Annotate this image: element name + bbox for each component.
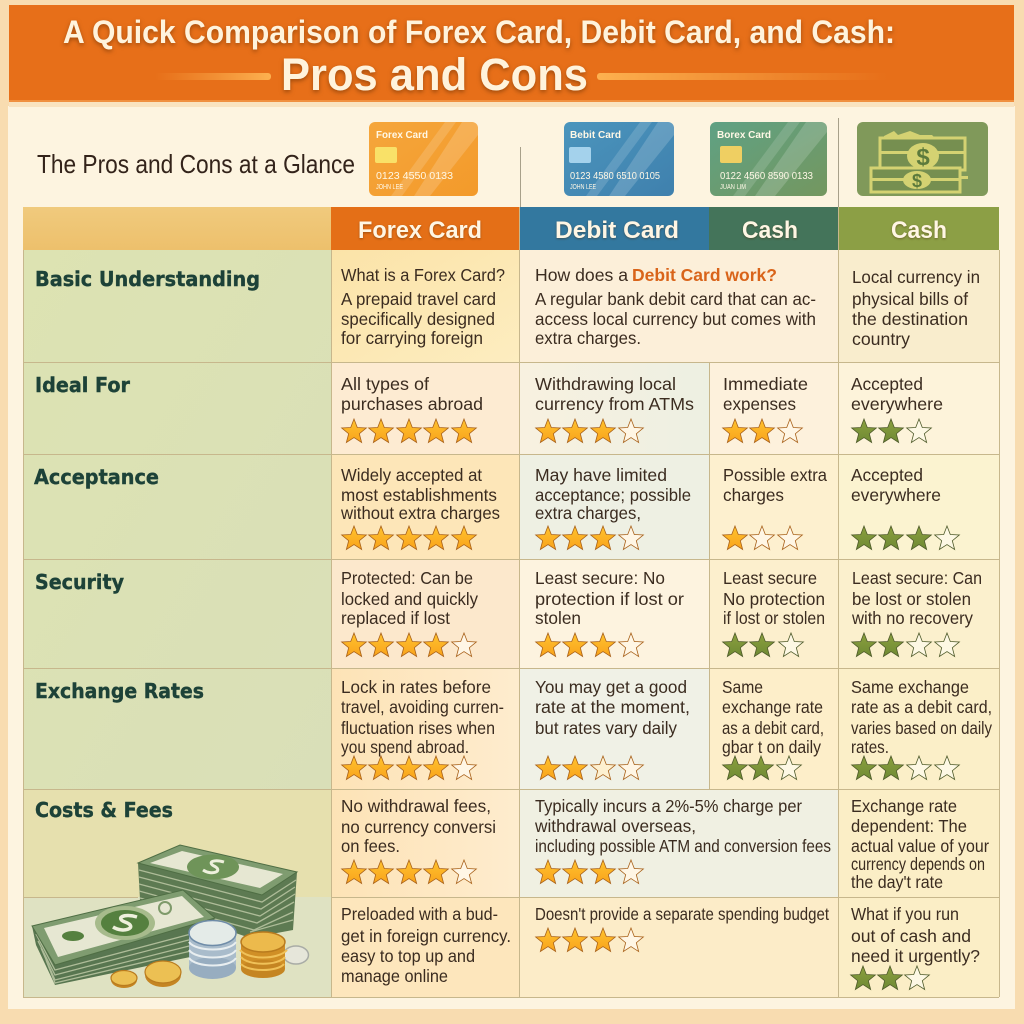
row: exchange rates, forex xyxy=(341,677,504,757)
icon: green card: JUAN LIM xyxy=(720,184,746,191)
header: forex card: Forex Card xyxy=(358,217,482,244)
row: basic understanding, cash xyxy=(852,267,980,349)
row: basic understanding, forex: What is a Forex Card? xyxy=(341,265,505,285)
row: ideal for, debit xyxy=(535,374,694,414)
row: exchange rates, cash olive: rate as a debit card, xyxy=(851,697,992,717)
row: ideal for, cash olive xyxy=(851,374,943,414)
row: budget, cash: need it urgently? xyxy=(851,946,980,966)
title line one: A Quick Comparison of Forex Card, Debit Card, and Cash: xyxy=(63,14,895,50)
stars: ideal for, debit 3 of 4 xyxy=(536,419,643,443)
row: security, forex: Protected: Can be xyxy=(341,568,473,588)
row: exchange rates, forex: fluctuation rises when xyxy=(341,718,495,738)
row: acceptance, cash green: charges xyxy=(723,485,784,505)
icon: cash: $ xyxy=(916,144,930,171)
row: security, debit: stolen xyxy=(535,608,581,628)
stars: ideal for, forex 5 of 5 xyxy=(342,419,476,443)
stars: acceptance, cash olive 3 of 4 xyxy=(852,526,959,550)
row: acceptance, cash green: Possible extra xyxy=(723,465,827,485)
row: acceptance, debit xyxy=(535,465,691,523)
row: basic understanding, debit xyxy=(535,265,816,348)
stars: security, cash olive 2 of 4 xyxy=(852,633,959,657)
row: budget, cash xyxy=(851,904,980,966)
row: exchange rates, cash green: as a debit card, xyxy=(722,718,824,738)
header: forex card xyxy=(331,207,519,250)
title banner xyxy=(9,5,1014,107)
row: basic understanding, cash: physical bills of xyxy=(852,289,968,309)
row: ideal for, cash green: expenses xyxy=(723,394,796,414)
row: ideal for, debit: Withdrawing local xyxy=(535,374,676,394)
row: exchange rates, forex: you spend abroad. xyxy=(341,737,469,757)
row: security, forex: replaced if lost xyxy=(341,608,450,628)
stars: ideal for, cash olive 2 of 3 xyxy=(852,419,931,443)
row: basic understanding, debit: A regular bank debit card that can ac- xyxy=(535,289,816,309)
row: security, cash olive: Least secure: Can xyxy=(852,568,982,588)
row: budget, forex: manage online xyxy=(341,966,448,986)
row: ideal for, forex: purchases abroad xyxy=(341,394,483,414)
icon: green card: 0122 4560 8590 0133 xyxy=(720,171,813,182)
back banknote stack xyxy=(138,845,297,938)
illustration: money stacks and coins xyxy=(32,845,308,988)
row: acceptance, cash olive xyxy=(851,465,941,505)
cell backgrounds xyxy=(331,250,999,997)
row: acceptance, forex: Widely accepted at xyxy=(341,465,482,485)
gold coin large xyxy=(145,961,181,987)
title rule right xyxy=(597,73,887,80)
row: acceptance, debit: acceptance; possible xyxy=(535,485,691,505)
row: ideal for, cash olive: Accepted xyxy=(851,374,923,394)
label: exchange rates: Exchange Rates xyxy=(35,679,204,703)
front banknote stack xyxy=(32,890,215,985)
header blank cell xyxy=(23,207,331,250)
title line two: Pros and Cons xyxy=(281,49,588,100)
row: budget, debit: Doesn't provide a separate spending budget xyxy=(535,904,829,924)
row: basic understanding, cash: Local currency in xyxy=(852,267,980,287)
row: exchange rates, cash green: exchange rate xyxy=(722,697,823,717)
stars: security, cash green 2 of 3 xyxy=(723,633,803,657)
row: exchange rates, debit: but rates vary daily xyxy=(535,718,677,738)
row: ideal for, forex xyxy=(341,374,483,414)
row: acceptance, debit: May have limited xyxy=(535,465,667,485)
stars: exchange rates, cash green 2 of 3 xyxy=(723,756,801,780)
row: basic understanding, debit: Debit Card work? xyxy=(632,265,777,285)
row: acceptance, forex xyxy=(340,465,500,523)
row: security, forex: locked and quickly xyxy=(341,589,478,609)
stars: budget, debit 3 of 4 xyxy=(536,928,643,952)
icon: cash xyxy=(857,122,988,196)
table grid xyxy=(23,207,1000,998)
icon: debit card: 0123 4580 6510 0105 xyxy=(570,171,660,182)
row: security, cash olive xyxy=(851,568,982,628)
stars: exchange rates, debit 2 of 4 xyxy=(536,756,643,780)
row: budget, cash: out of cash and xyxy=(851,926,971,946)
row: basic understanding, cash: country xyxy=(852,329,910,349)
row: budget, forex: easy to top up and xyxy=(341,946,475,966)
row: security, debit xyxy=(535,568,684,628)
row: costs and fees, forex xyxy=(341,796,496,856)
icon: debit card: Bebit Card xyxy=(570,130,621,141)
stars: acceptance, debit 3 of 4 xyxy=(536,526,643,550)
label: costs and fees: Costs & Fees xyxy=(35,798,173,822)
row: ideal for, cash olive: everywhere xyxy=(851,394,943,414)
label: basic understanding: Basic Understanding xyxy=(35,267,260,291)
row: costs and fees, cash: currency depends on xyxy=(851,854,985,874)
row: exchange rates, cash green: Same xyxy=(722,677,763,697)
row: exchange rates, cash green: gbar t on daily xyxy=(722,737,821,757)
icon: forex card xyxy=(369,122,478,196)
row: costs and fees, debit: withdrawal overseas, xyxy=(534,816,696,836)
stars: security, debit 3 of 4 xyxy=(536,633,643,657)
stars: costs and fees, forex 4 of 5 xyxy=(342,860,476,884)
row: acceptance, cash olive: everywhere xyxy=(851,485,941,505)
title rule left xyxy=(155,73,271,80)
row: basic understanding, forex: specifically designed xyxy=(341,309,495,329)
row: costs and fees, forex: no currency conversi xyxy=(341,817,496,837)
icon: forex card: JOHN LEE xyxy=(376,184,403,191)
row: costs and fees, cash: actual value of your xyxy=(851,836,989,856)
row: exchange rates, forex: travel, avoiding curren- xyxy=(341,697,504,717)
stars: acceptance, cash green 1 of 3 xyxy=(723,526,802,550)
gold coin stack xyxy=(240,932,287,978)
row: costs and fees, cash: the day't rate xyxy=(851,872,943,892)
header: cash green xyxy=(709,207,838,250)
silver coin stack xyxy=(189,920,236,979)
column dividers above table xyxy=(520,118,838,207)
row: budget, cash: What if you run xyxy=(851,904,959,924)
row: costs and fees, debit: including possible ATM and conversion fees xyxy=(535,836,831,856)
row: security, cash green: Least secure xyxy=(723,568,817,588)
row: security, cash olive: be lost or stolen xyxy=(852,589,971,609)
stars: exchange rates, forex 4 of 5 xyxy=(342,756,476,780)
subheading: The Pros and Cons at a Glance xyxy=(37,149,355,179)
gold coin small xyxy=(111,970,137,988)
row: budget, forex: Preloaded with a bud- xyxy=(341,904,498,924)
row: costs and fees, cash xyxy=(851,796,989,892)
row: exchange rates, forex: Lock in rates before xyxy=(341,677,491,697)
row: acceptance, cash olive: Accepted xyxy=(851,465,923,485)
stars: budget, cash 2 of 3 xyxy=(851,966,929,990)
row: security, forex xyxy=(341,568,478,628)
icon: forex card: 0123 4550 0133 xyxy=(376,171,453,182)
stars: security, forex 4 of 5 xyxy=(342,633,476,657)
row label backgrounds xyxy=(23,250,331,997)
row: basic understanding, forex: for carrying foreign xyxy=(341,328,483,348)
header: debit card xyxy=(519,207,709,250)
icon: cash: $ xyxy=(912,171,922,191)
row: budget, forex xyxy=(341,904,511,986)
icon: green card: Borex Card xyxy=(717,130,771,141)
single silver coin xyxy=(284,946,308,964)
row: security, debit: protection if lost or xyxy=(535,589,684,609)
header: cash green: Cash xyxy=(742,217,798,244)
icon: debit card xyxy=(564,122,674,196)
row: ideal for, debit: currency from ATMs xyxy=(535,394,694,414)
row: exchange rates, cash olive xyxy=(851,677,992,757)
stars: exchange rates, cash olive 2 of 4 xyxy=(852,756,959,780)
label: security: Security xyxy=(35,570,124,594)
icon: forex card: Forex Card xyxy=(376,130,428,141)
row: ideal for, forex: All types of xyxy=(341,374,429,394)
stars: ideal for, cash green 2 of 3 xyxy=(723,419,802,443)
stars: acceptance, forex 5 of 5 xyxy=(342,526,476,550)
row: basic understanding, debit: access local currency but comes with xyxy=(535,309,816,329)
stars: costs and fees, debit 3 of 4 xyxy=(536,860,643,884)
row: acceptance, forex: without extra charges xyxy=(340,503,500,523)
row: exchange rates, cash olive: varies based on daily xyxy=(851,718,992,738)
icon: debit card: JOHN LEE xyxy=(570,184,596,191)
row: exchange rates, cash olive: Same exchange xyxy=(851,677,969,697)
row: ideal for, cash green xyxy=(723,374,808,414)
header: cash olive xyxy=(838,207,999,250)
row: basic understanding, cash: the destination xyxy=(852,309,968,329)
row: exchange rates, cash green xyxy=(722,677,824,757)
row: security, cash green: if lost or stolen xyxy=(723,608,825,628)
row: ideal for, cash green: Immediate xyxy=(723,374,808,394)
table header xyxy=(23,207,999,250)
row: budget, forex: get in foreign currency. xyxy=(341,926,511,946)
row: security, cash olive: with no recovery xyxy=(851,608,973,628)
row: acceptance, forex: most establishments xyxy=(341,485,497,505)
header: cash olive: Cash xyxy=(891,217,947,244)
row: basic understanding, forex xyxy=(341,265,505,348)
label: acceptance: Acceptance xyxy=(34,465,159,489)
row: costs and fees, forex: on fees. xyxy=(341,836,400,856)
row: exchange rates, cash olive: rates. xyxy=(851,737,889,757)
icon: green card xyxy=(710,122,827,196)
row: exchange rates, debit: You may get a good xyxy=(535,677,687,697)
row: costs and fees, debit: Typically incurs a 2%-5% charge per xyxy=(535,796,802,816)
row: exchange rates, debit xyxy=(535,677,690,738)
row: basic understanding, forex: A prepaid travel card xyxy=(341,289,496,309)
row: security, cash green xyxy=(723,568,825,628)
row: security, cash green: No protection xyxy=(723,589,825,609)
row: acceptance, cash green xyxy=(723,465,827,505)
header: debit card: Debit Card xyxy=(555,217,679,244)
row: exchange rates, debit: rate at the moment, xyxy=(535,697,690,717)
row: costs and fees, cash: dependent: The xyxy=(851,816,967,836)
label: ideal for: Ideal For xyxy=(35,373,131,397)
row: costs and fees, forex: No withdrawal fees, xyxy=(341,796,491,816)
row: costs and fees, cash: Exchange rate xyxy=(851,796,957,816)
row: basic understanding, debit: How does a xyxy=(535,265,628,285)
row: acceptance, debit: extra charges, xyxy=(535,503,641,523)
row: basic understanding, debit: extra charges. xyxy=(535,328,641,348)
row: costs and fees, debit xyxy=(534,796,831,856)
row: security, debit: Least secure: No xyxy=(535,568,665,588)
